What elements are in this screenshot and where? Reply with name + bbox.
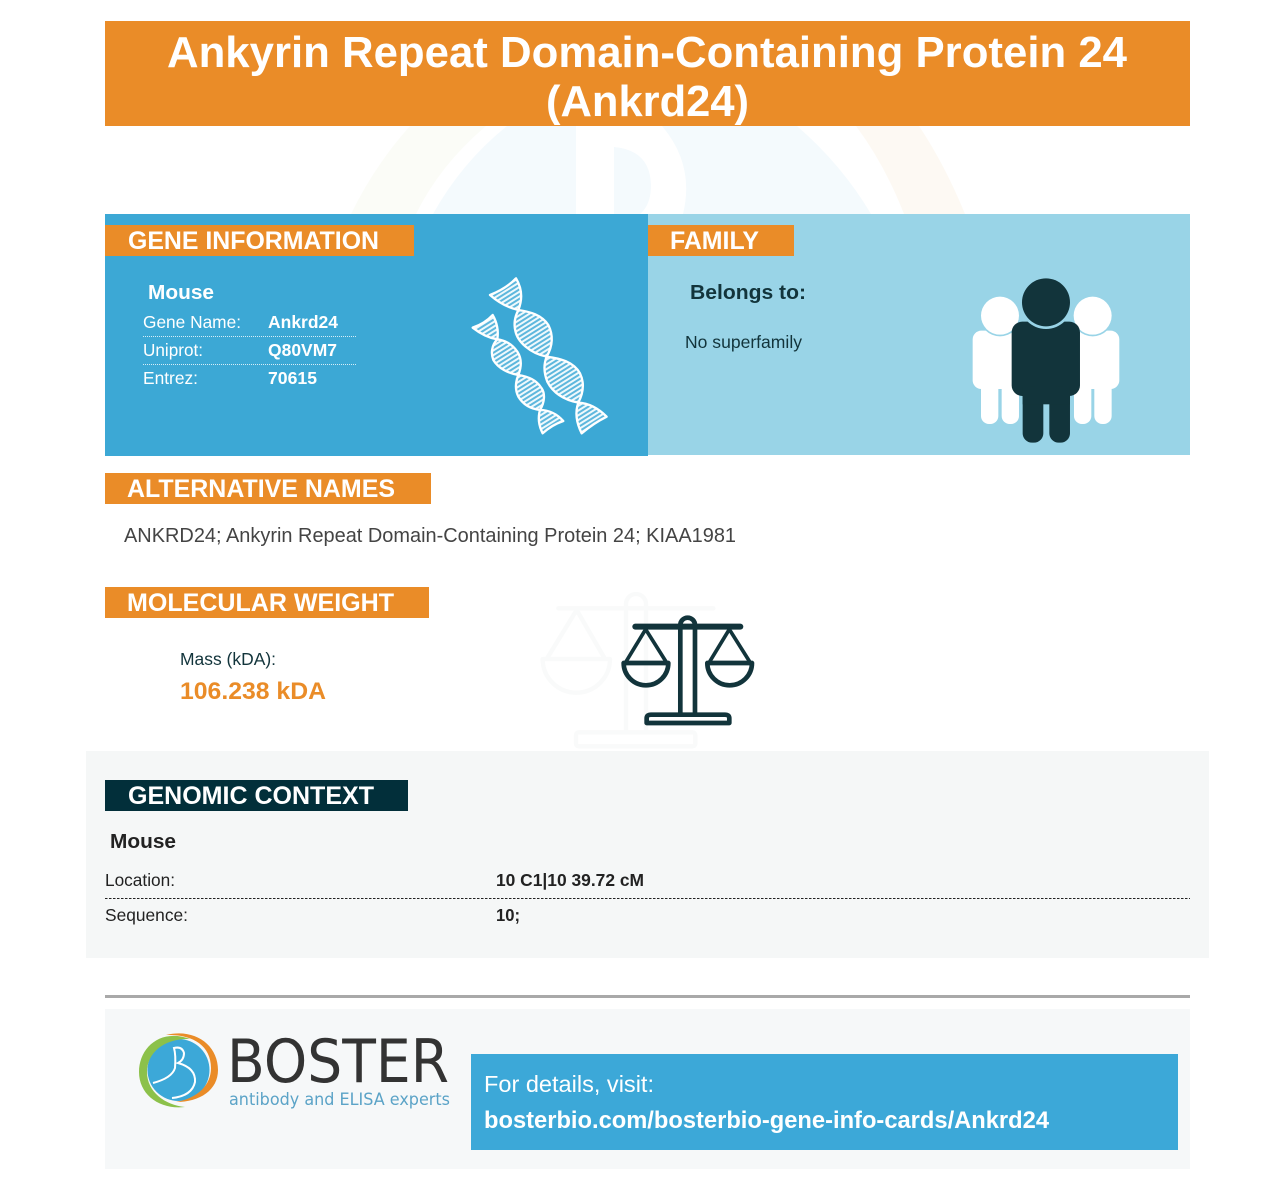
heading: genomic context: GENOMIC CONTEXT xyxy=(128,782,374,810)
section: alternative names xyxy=(105,473,736,547)
gene details table: 70615 xyxy=(268,368,317,388)
icon: ghost scale watermark xyxy=(543,594,713,746)
alternative names text: ANKRD24; Ankyrin Repeat Domain-Containing Protein 24; KIAA1981 xyxy=(124,525,736,547)
icon: balance scale xyxy=(624,618,752,723)
heading: molecular weight: MOLECULAR WEIGHT xyxy=(127,589,394,617)
callout: details link: bosterbio.com/bosterbio-gene-info-cards/Ankrd24 xyxy=(484,1107,1050,1134)
panel: footer xyxy=(105,1009,1190,1169)
species label: Mouse xyxy=(148,282,214,304)
mass value: 106.238 kDA xyxy=(180,678,326,705)
heading: alternative names: ALTERNATIVE NAMES xyxy=(127,475,395,503)
logo: Boster xyxy=(139,1027,450,1109)
watermark logo xyxy=(351,126,965,214)
panel: gene information xyxy=(105,214,648,456)
callout: details link xyxy=(471,1054,1178,1150)
genomic details table: 10 C1|10 39.72 cM xyxy=(496,870,644,890)
family value: No superfamily xyxy=(685,332,802,352)
species label: Mouse xyxy=(110,831,176,853)
section: molecular weight xyxy=(105,587,429,705)
icon: DNA helices xyxy=(473,278,607,433)
logo wordmark: BOSTER xyxy=(227,1027,449,1097)
panel: genomic context xyxy=(86,751,1209,958)
logo tagline: antibody and ELISA experts xyxy=(229,1090,450,1109)
gene details table: Uniprot: xyxy=(143,340,203,360)
genomic details table xyxy=(105,870,1190,925)
genomic details table: 10; xyxy=(496,905,520,925)
icon: group of people xyxy=(973,276,1119,443)
title banner: Ankyrin Repeat Domain-Containing Protein 24 xyxy=(167,28,1128,77)
gene details table: Q80VM7 xyxy=(268,340,337,360)
gene details table xyxy=(143,312,357,388)
heading: family xyxy=(648,225,794,256)
gene details table: Ankrd24 xyxy=(268,312,338,332)
heading: family: FAMILY xyxy=(670,227,759,255)
mass label: Mass (kDA): xyxy=(180,649,276,669)
heading: gene information: GENE INFORMATION xyxy=(128,227,379,255)
callout: details link: For details, visit: xyxy=(484,1071,654,1097)
gene details table: Entrez: xyxy=(143,368,198,388)
genomic details table: Sequence: xyxy=(105,905,188,925)
belongs to label: Belongs to: xyxy=(690,282,806,304)
title banner xyxy=(105,21,1190,126)
panel: family xyxy=(648,214,1190,455)
genomic details table: Location: xyxy=(105,870,175,890)
title banner: (Ankrd24) xyxy=(546,77,749,126)
logo mark xyxy=(139,1033,218,1107)
gene details table: Gene Name: xyxy=(143,312,241,332)
